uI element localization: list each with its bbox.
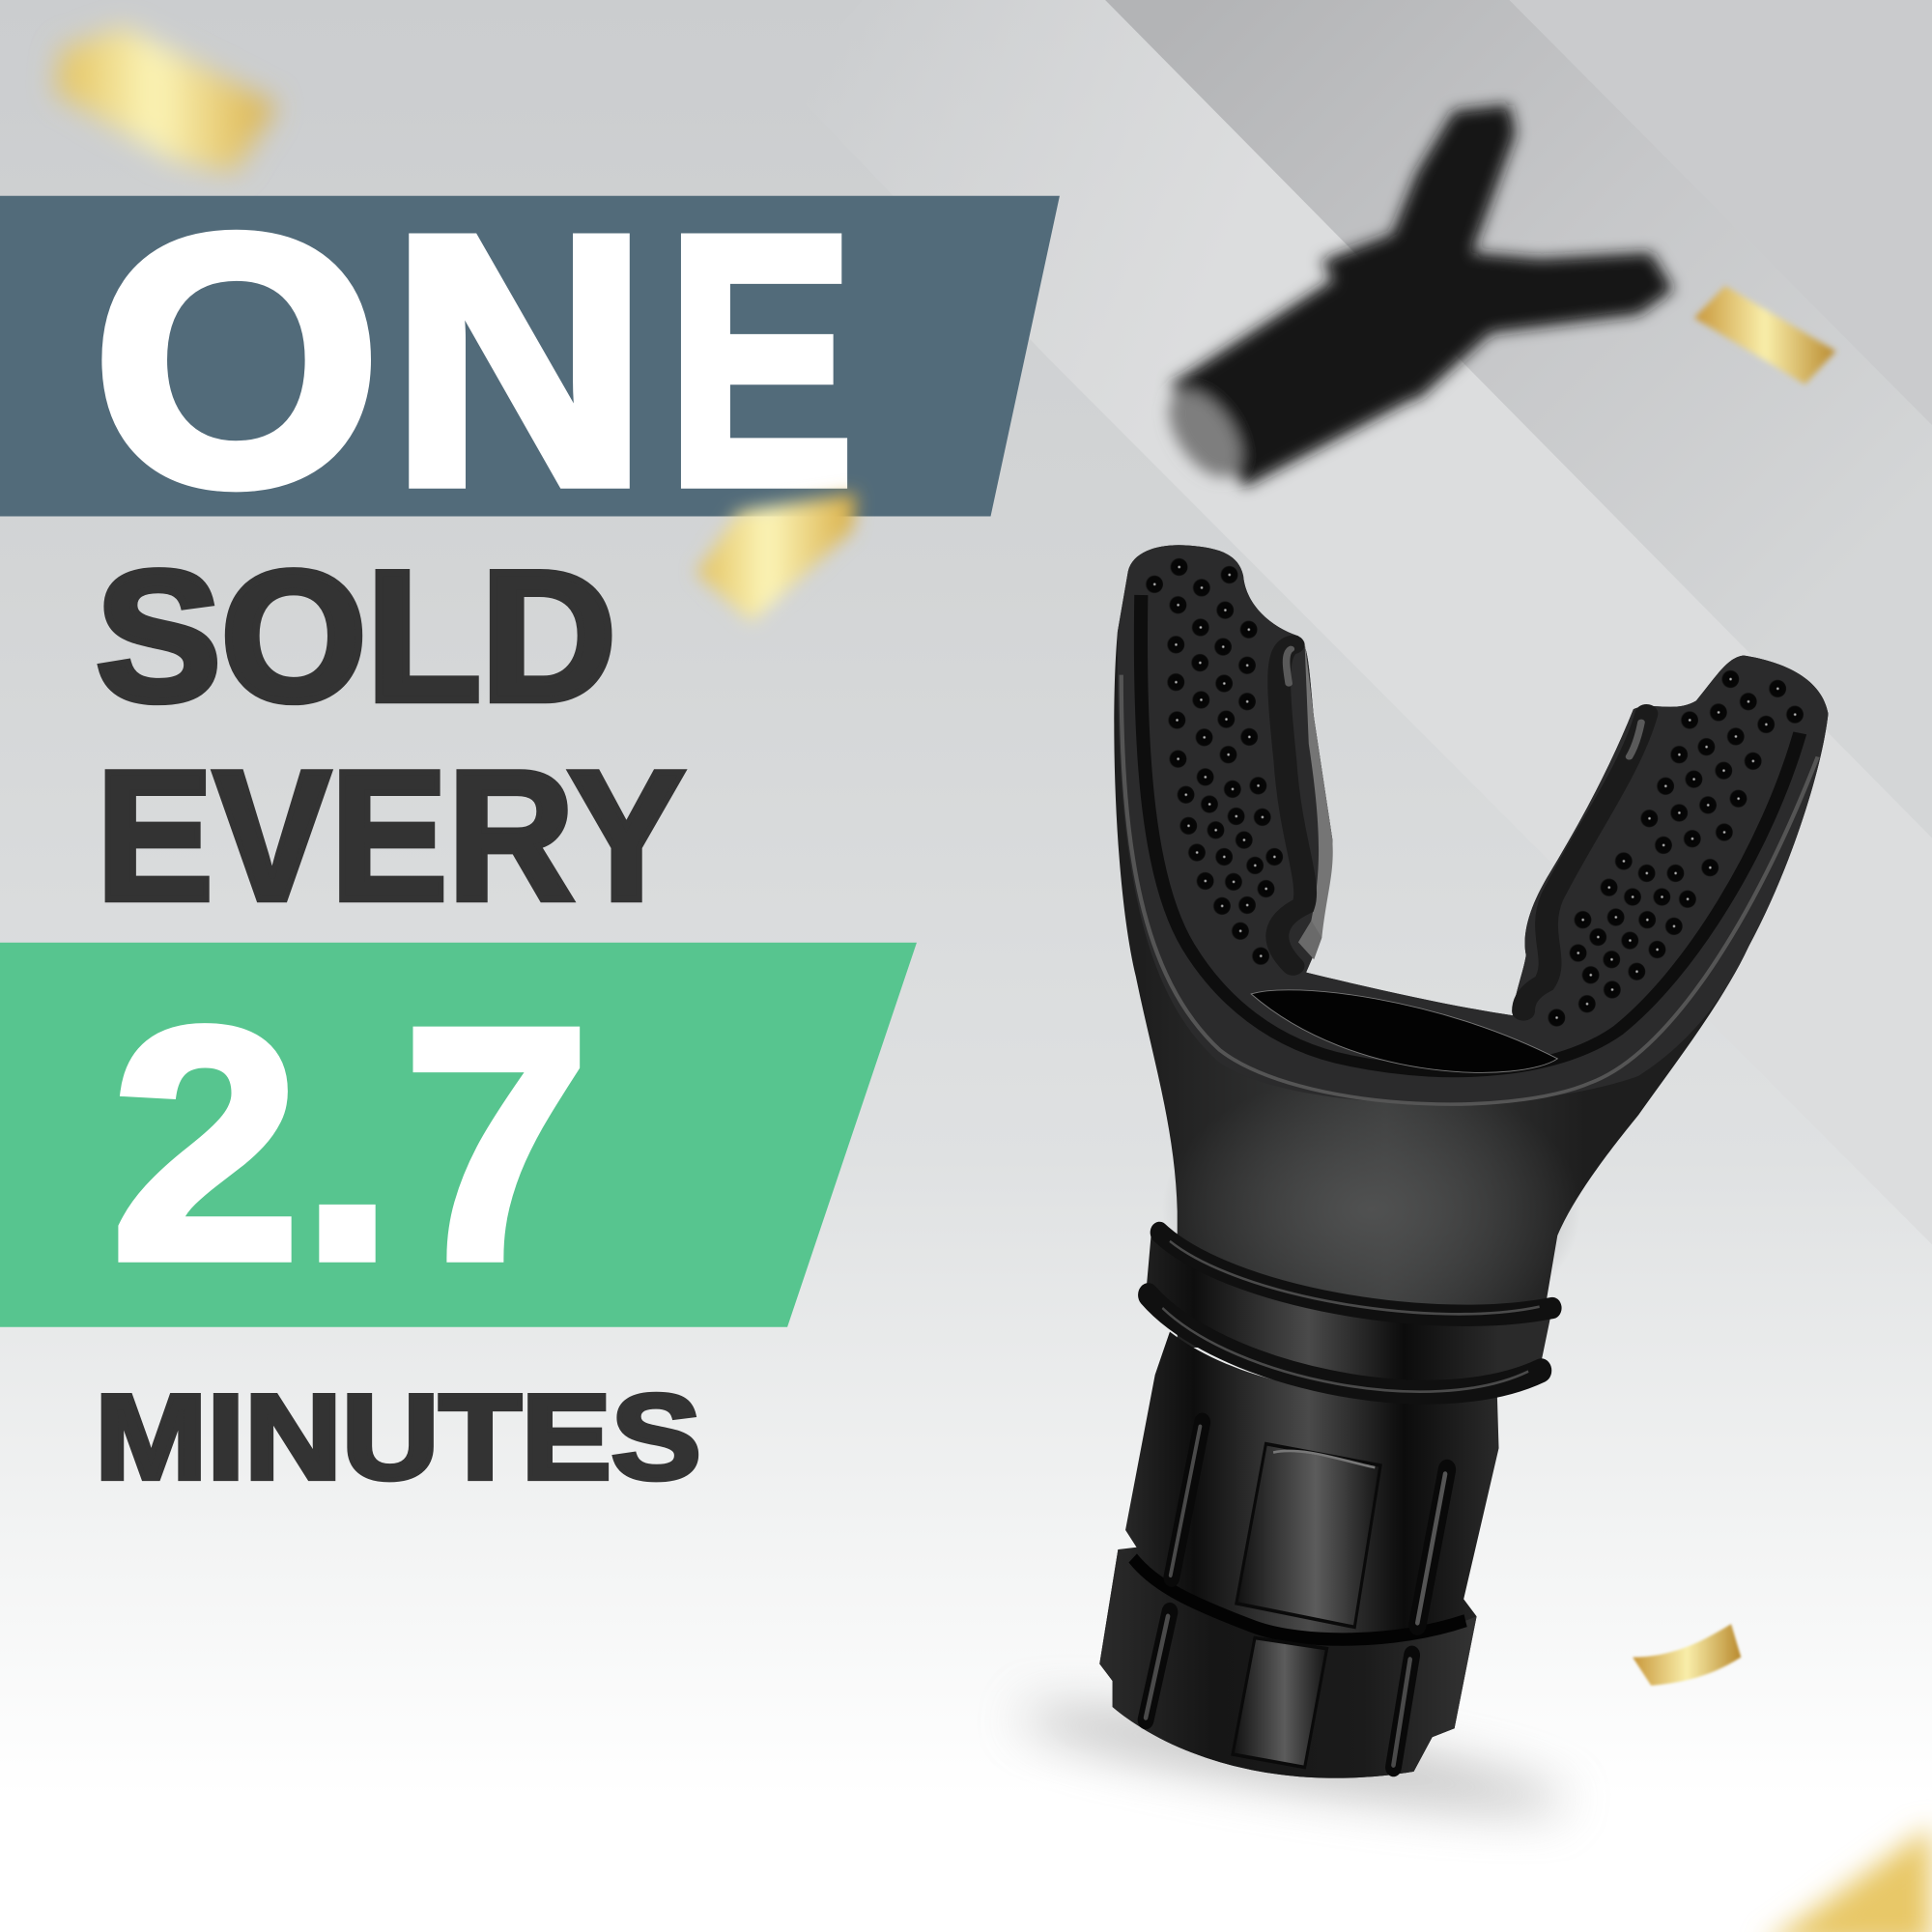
separator gap [1133, 1558, 1465, 1639]
text: SOLD: SOLD [96, 532, 616, 739]
body glow [1162, 1071, 1581, 1348]
mouthpiece collar and threaded base [1099, 1233, 1552, 1778]
upper key [1236, 1444, 1380, 1627]
base cylinder [1099, 1332, 1499, 1778]
lower key [1233, 1638, 1327, 1767]
confetti: gold piece over banner edge [696, 493, 856, 622]
ribs [1146, 1422, 1447, 1767]
floor and mouth hole [1251, 990, 1557, 1072]
inner channel [1141, 595, 1800, 1071]
banner: 2.7: 7 [403, 960, 590, 1328]
confetti: lower right gold piece [1633, 1624, 1741, 1686]
text: MINUTES: MINUTES [95, 1371, 701, 1505]
left side flap highlight [1304, 640, 1333, 938]
lower ring [1149, 1295, 1542, 1392]
confetti: top-left gold piece [55, 27, 277, 173]
banner: 2.7: 2 [111, 960, 300, 1328]
lower knurled ring [1099, 1549, 1477, 1778]
rim highlight [1122, 675, 1818, 1104]
product: mouthpiece [1099, 545, 1829, 1778]
banner: 2.7: . [300, 960, 394, 1328]
right ridge [1523, 714, 1646, 1011]
banner: ONE: O [93, 161, 381, 558]
confetti: bottom corner gold piece [1762, 1826, 1932, 1932]
left ridge [1277, 644, 1305, 966]
banner: ONE: N [390, 161, 648, 558]
banner: ONE: E [667, 161, 854, 558]
banner: 2.7 [0, 943, 917, 1328]
text: EVERY: EVERY [96, 732, 685, 939]
teeth grip dots [1146, 558, 1804, 1027]
product shadow [1015, 1690, 1572, 1830]
upper ring [1159, 1233, 1552, 1316]
collar section between rings [1146, 1233, 1552, 1392]
confetti: right gold piece [1694, 286, 1836, 384]
banner: ONE [0, 161, 1060, 558]
blurred background product [1154, 104, 1673, 490]
mouthpiece upper body [1114, 545, 1829, 1348]
